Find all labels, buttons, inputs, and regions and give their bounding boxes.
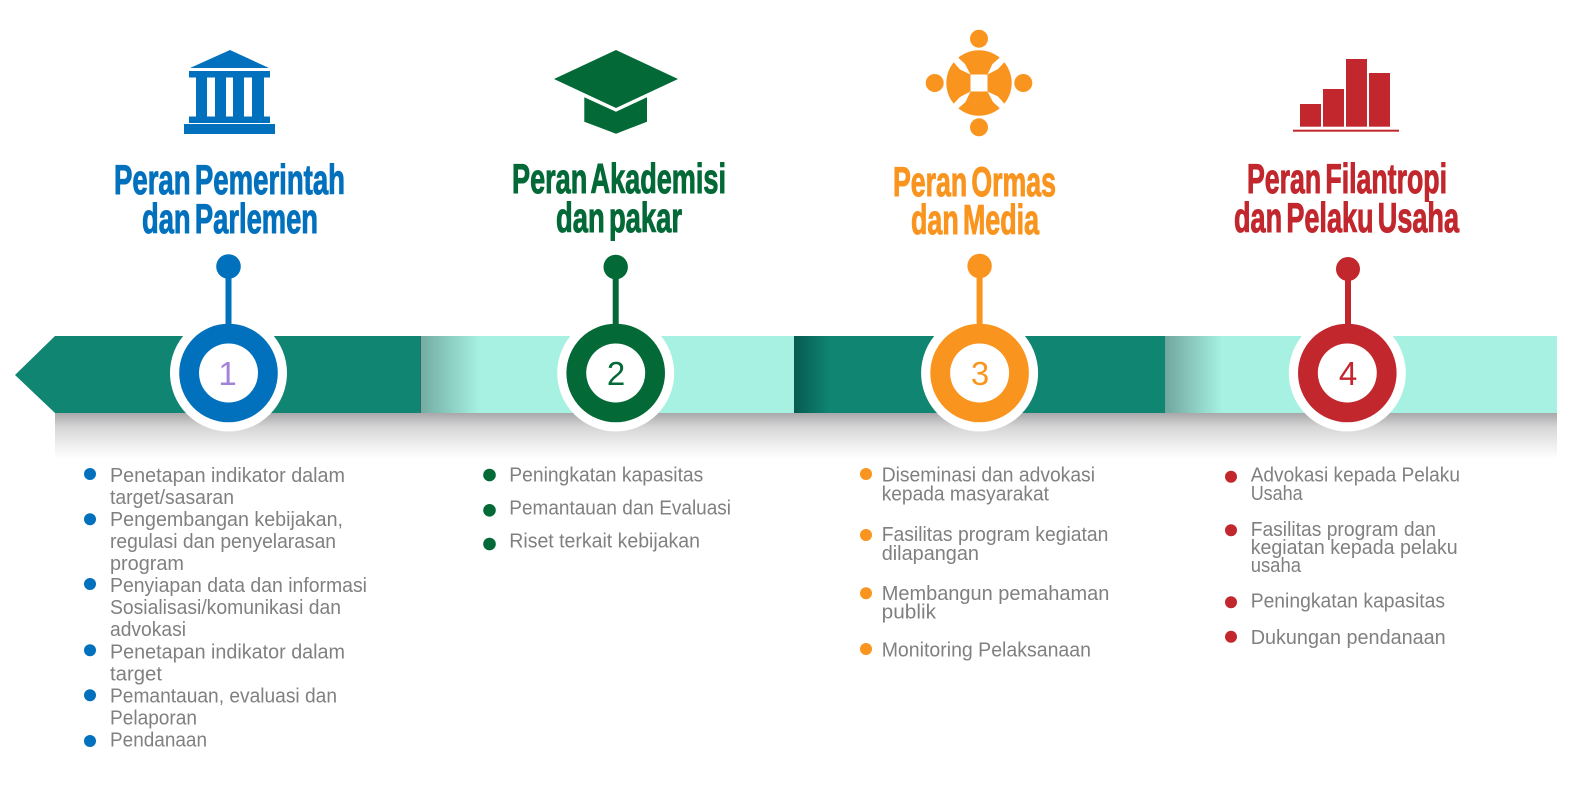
bullet list: Pemantauan, evaluasi dan [110,686,337,708]
bullet list: Fasilitas program dan [1251,519,1436,541]
bullet list: Diseminasi dan advokasi [882,465,1095,487]
segment 2 [420,336,794,413]
number badge 2 [557,314,674,432]
bullet list: regulasi dan penyelarasan [110,531,336,553]
pin connector [216,254,241,326]
heading: Peran Filantropi [1247,155,1447,202]
panel: pemerintah dan parlemen [84,50,367,752]
bullet list: kegiatan kepada pelaku [1251,537,1458,559]
bullet list: Pendanaan [110,730,207,752]
bullet list: Peningkatan kapasitas [509,465,703,487]
number badge 1: 1 [218,355,237,392]
heading: dan Media [911,196,1040,243]
heading [114,156,345,242]
number badge 4 [1289,314,1406,432]
pin connector [967,254,992,326]
bullet list: Dukungan pendanaan [1251,627,1446,649]
heading: dan pakar [556,194,682,241]
number badge 3: 3 [971,355,989,392]
bullet list: Pengembangan kebijakan, [110,509,343,531]
bullet list [84,465,367,752]
number badge 4: 4 [1339,355,1357,392]
panel: filantropi dan pelaku usaha [1225,59,1460,649]
bullet list: Penetapan indikator dalam [110,642,345,664]
bullet list [860,465,1109,662]
bullet list: dilapangan [882,543,979,565]
number badge 3 [921,314,1038,432]
heading [893,158,1056,243]
icon: government building [184,50,275,134]
number badge 1 [170,314,287,432]
bullet list: Penyiapan data dan informasi [110,575,367,597]
timeline arrow bar [15,336,1557,459]
bullet list [1225,465,1460,649]
bullet list: Riset terkait kebijakan [509,531,700,553]
segment 3 [794,336,1165,413]
heading [1234,155,1460,241]
bullet list: kepada masyarakat [882,484,1049,506]
bullet list: Monitoring Pelaksanaan [882,640,1091,662]
panel: ormas dan media [860,30,1109,662]
bullet list: Penetapan indikator dalam [110,465,345,487]
bullet list: Pelaporan [110,708,197,730]
heading: Peran Ormas [893,158,1056,205]
segment 1 arrow [15,336,420,413]
bullet list: target [110,664,162,686]
bullet list: Membangun pemahaman [882,583,1109,605]
icon: bar chart [1293,59,1399,132]
pin connector [604,255,628,326]
bullet list: program [110,553,184,575]
bullet list: Advokasi kepada Pelaku [1251,465,1460,487]
bullet list [483,465,731,553]
heading: dan Pelaku Usaha [1234,194,1460,241]
bullet list: usaha [1251,555,1302,577]
segment 4 [1165,336,1557,413]
heading: Peran Akademisi [512,155,726,202]
pin connector [1336,257,1360,326]
bar shadow [55,413,1557,459]
bullet list: Pemantauan dan Evaluasi [509,497,731,519]
heading: dan Parlemen [142,195,318,242]
icon: graduation cap [554,50,678,134]
panel: akademisi dan pakar [483,50,731,553]
bullet list: Fasilitas program kegiatan [882,524,1108,546]
heading [512,155,726,241]
bullet list: target/sasaran [110,487,234,509]
bullet list: Usaha [1251,483,1303,505]
icon: people circle [926,30,1032,136]
bullet list: Peningkatan kapasitas [1251,591,1445,613]
bullet list: advokasi [110,619,186,641]
bullet list: Sosialisasi/komunikasi dan [110,597,341,619]
bullet list: publik [882,601,937,623]
heading: Peran Pemerintah [114,156,345,203]
number badge 2: 2 [607,355,625,392]
